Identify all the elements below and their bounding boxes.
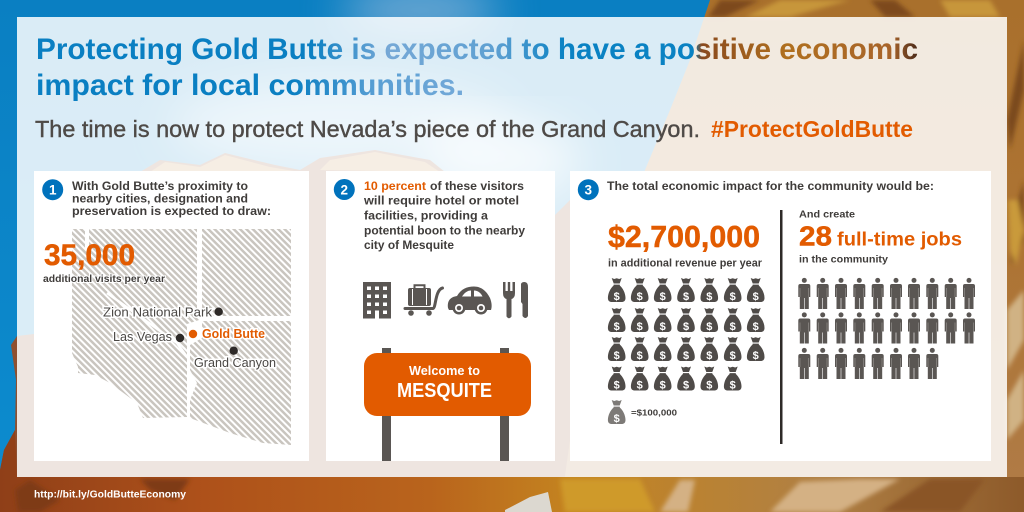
panel 2 text: of these visitors — [430, 179, 524, 193]
35,000 statistic — [43, 239, 165, 285]
money bag pictogram: 27 bags: $ — [730, 380, 736, 392]
map location: Gold Butte: Gold Butte — [202, 327, 265, 341]
money bag pictogram: 27 bags: $ — [614, 350, 620, 362]
panel 1 intro text: nearby cities, designation and — [72, 192, 248, 206]
panel 2 text — [363, 179, 525, 252]
money bag pictogram: 27 bags: $ — [683, 350, 689, 362]
jobs statistic — [799, 208, 962, 266]
panel 3 heading: The total economic impact for the community would be: — [607, 179, 934, 193]
subtitle with hashtag: The time is now to protect Nevada’s piece of the Grand Canyon. — [35, 116, 700, 142]
welcome sign: Welcome to — [409, 363, 480, 378]
title — [36, 33, 918, 102]
jobs statistic: 28 — [799, 221, 832, 252]
panel 2 text: potential boon to the nearby — [364, 223, 525, 237]
panel 3: economic impact — [570, 171, 991, 461]
money bag pictogram: 27 bags: $ — [637, 291, 643, 303]
35,000 statistic: 35,000 — [44, 239, 135, 272]
title: Protecting Gold Butte is expected to have a positive economic — [36, 33, 918, 66]
vertical divider — [780, 210, 782, 444]
panel 2 text: city of Mesquite — [364, 238, 454, 252]
source link: http://bit.ly/GoldButteEconomy — [34, 490, 186, 500]
money bag pictogram: 27 bags: $ — [706, 380, 712, 392]
money bag pictogram: 27 bags: $ — [614, 380, 620, 392]
revenue statistic — [608, 219, 763, 270]
people pictogram: 28 jobs — [798, 278, 975, 379]
money bag pictogram: 27 bags — [608, 278, 764, 392]
money bag pictogram: 27 bags: $ — [683, 291, 689, 303]
number badge 2 — [334, 179, 355, 200]
icon: fork and knife — [503, 282, 528, 318]
money bag legend: =$100,000 — [631, 408, 677, 418]
number badge 1: 1 — [49, 182, 57, 198]
money bag pictogram: 27 bags: $ — [660, 350, 666, 362]
subtitle with hashtag: #ProtectGoldButte — [711, 116, 913, 142]
map location: Zion National Park: Zion National Park — [103, 306, 213, 320]
number badge 1 — [42, 179, 63, 200]
map location: Grand Canyon: Grand Canyon — [194, 356, 276, 370]
revenue statistic: in additional revenue per year — [608, 258, 763, 270]
money bag pictogram: 27 bags: $ — [753, 321, 759, 333]
panel 1 intro text: preservation is expected to draw: — [72, 204, 271, 218]
money bag legend: $ — [614, 413, 620, 425]
money bag pictogram: 27 bags: $ — [660, 291, 666, 303]
map location: Grand Canyon — [194, 346, 276, 370]
icon: hotel building — [363, 282, 391, 318]
number badge 3 — [578, 179, 599, 200]
money bag pictogram: 27 bags: $ — [683, 380, 689, 392]
money bag pictogram: 27 bags: $ — [637, 380, 643, 392]
money bag pictogram: 27 bags: $ — [730, 350, 736, 362]
icon: luggage cart — [405, 285, 442, 316]
35,000 statistic: additional visits per year — [43, 273, 165, 285]
money bag pictogram: 27 bags: $ — [706, 350, 712, 362]
number badge 3: 3 — [585, 182, 593, 198]
panel 2: lodging — [326, 171, 555, 461]
revenue statistic: $2,700,000 — [608, 219, 760, 254]
title: impact for local communities. — [36, 69, 464, 102]
panel 1 intro text — [72, 179, 271, 218]
welcome sign — [364, 348, 531, 461]
money bag pictogram: 27 bags: $ — [730, 321, 736, 333]
money bag pictogram: 27 bags: $ — [614, 291, 620, 303]
money bag pictogram: 27 bags: $ — [660, 321, 666, 333]
money bag pictogram: 27 bags: $ — [614, 321, 620, 333]
money bag legend — [608, 400, 677, 425]
striped regional map — [72, 229, 291, 445]
jobs statistic: in the community — [799, 254, 888, 266]
money bag pictogram: 27 bags: $ — [637, 321, 643, 333]
map location: Las Vegas: Las Vegas — [113, 330, 172, 344]
money bag pictogram: 27 bags: $ — [706, 321, 712, 333]
panel 1 intro text: With Gold Butte’s proximity to — [72, 179, 248, 193]
money bag pictogram: 27 bags: $ — [753, 291, 759, 303]
welcome sign: MESQUITE — [397, 379, 492, 402]
money bag pictogram: 27 bags: $ — [637, 350, 643, 362]
jobs statistic: full-time jobs — [837, 230, 962, 251]
money bag pictogram: 27 bags: $ — [730, 291, 736, 303]
panel 1: visits — [34, 171, 309, 461]
jobs statistic: And create — [799, 208, 855, 220]
panel 2 text: will require hotel or motel — [363, 194, 519, 208]
money bag pictogram: 27 bags: $ — [660, 380, 666, 392]
money bag pictogram: 27 bags: $ — [683, 321, 689, 333]
panel 2 text: 10 percent — [364, 179, 426, 193]
panel 2 text: facilities, providing a — [364, 208, 488, 222]
money bag pictogram: 27 bags: $ — [706, 291, 712, 303]
number badge 2: 2 — [341, 182, 348, 197]
money bag pictogram: 27 bags: $ — [753, 350, 759, 362]
icon: car — [448, 286, 492, 314]
